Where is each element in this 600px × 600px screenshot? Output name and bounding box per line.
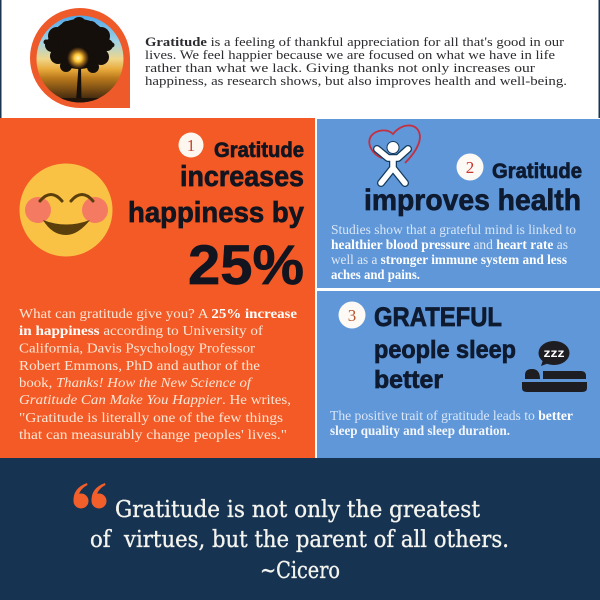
body text: health: aches and pains.	[331, 268, 420, 283]
icon: bed with zzz bubble: zzz	[544, 346, 564, 360]
heading: grateful people sleep better: GRATEFUL	[374, 302, 502, 332]
quote text: of virtues, but the parent of all others.	[90, 525, 509, 553]
body text: happiness: What can gratitude give you? A 25% increase	[19, 307, 297, 322]
intro text	[145, 34, 567, 88]
body text: sleep	[330, 409, 573, 439]
body text: happiness: California, Davis Psychology Professor	[19, 342, 255, 356]
number badge 2: 2	[466, 158, 474, 177]
heading: grateful people sleep better: better	[374, 366, 443, 394]
intro text: happiness, as research shows, but also improves health and well-being.	[145, 73, 567, 88]
icon: heart and person	[369, 125, 420, 183]
panel: improves health	[317, 119, 600, 288]
body text: happiness: Gratitude Can Make You Happier . He writes,	[19, 393, 291, 408]
heading: gratitude increases happiness by 25%	[128, 139, 304, 296]
number badge 3: 3	[348, 306, 356, 325]
heading: gratitude improves health	[364, 160, 582, 217]
heading: grateful people sleep better: people sleep	[374, 336, 516, 364]
quote text: Gratitude is not only the greatest	[115, 495, 480, 523]
body text: happiness: that can measurably change peoples' lives."	[19, 428, 287, 443]
body text: sleep: sleep quality and sleep duration.	[330, 424, 510, 439]
body text: happiness: in happiness according to University of	[19, 324, 263, 339]
intro text: Gratitude is a feeling of thankful appreciation for all that's good in our	[145, 34, 565, 49]
number badge 1: 1	[187, 136, 195, 155]
panel: quote	[0, 458, 600, 600]
icon: quotation mark	[73, 483, 106, 508]
panel: increases happiness	[0, 118, 315, 459]
heading: grateful people sleep better	[374, 302, 516, 394]
body text: health: Studies show that a grateful mind is linked to	[331, 223, 576, 238]
icon: sunset tree teardrop	[30, 8, 130, 108]
body text: happiness: book, Thanks! How the New Science of	[19, 376, 253, 391]
intro text: rather than what we lack. Giving thanks not only increases our	[145, 60, 536, 75]
heading: gratitude increases happiness by 25%: 25%	[188, 233, 304, 296]
body text: health: healthier blood pressure and heart rate as	[331, 238, 568, 253]
panel: sleep better	[317, 291, 600, 458]
heading: gratitude increases happiness by 25%: increases	[180, 161, 304, 193]
number badge 3	[338, 302, 366, 328]
heading: gratitude increases happiness by 25%: Gratitude	[214, 139, 304, 162]
intro text: lives. We feel happier because we are focused on what we have in life	[145, 47, 555, 62]
body text: sleep: The positive trait of gratitude leads to better	[330, 409, 573, 424]
heading: gratitude improves health: Gratitude	[492, 160, 582, 183]
quote text	[90, 495, 509, 584]
body text: health	[331, 223, 576, 283]
icon: bed with zzz bubble	[522, 341, 587, 392]
heading: gratitude improves health: improves health	[364, 184, 581, 217]
quote text: ~Cicero	[260, 556, 340, 584]
body text: happiness: Robert Emmons, PhD and author of the	[19, 359, 260, 374]
heading: gratitude increases happiness by 25%: happiness by	[128, 197, 304, 229]
body text: health: well as a stronger immune system and less	[331, 253, 568, 268]
number badge 2	[456, 154, 484, 180]
icon: smiling emoji	[20, 164, 112, 256]
number badge 1	[178, 132, 204, 158]
body text: happiness	[19, 307, 297, 443]
body text: happiness: "Gratitude is literally one of the few things	[19, 411, 283, 426]
